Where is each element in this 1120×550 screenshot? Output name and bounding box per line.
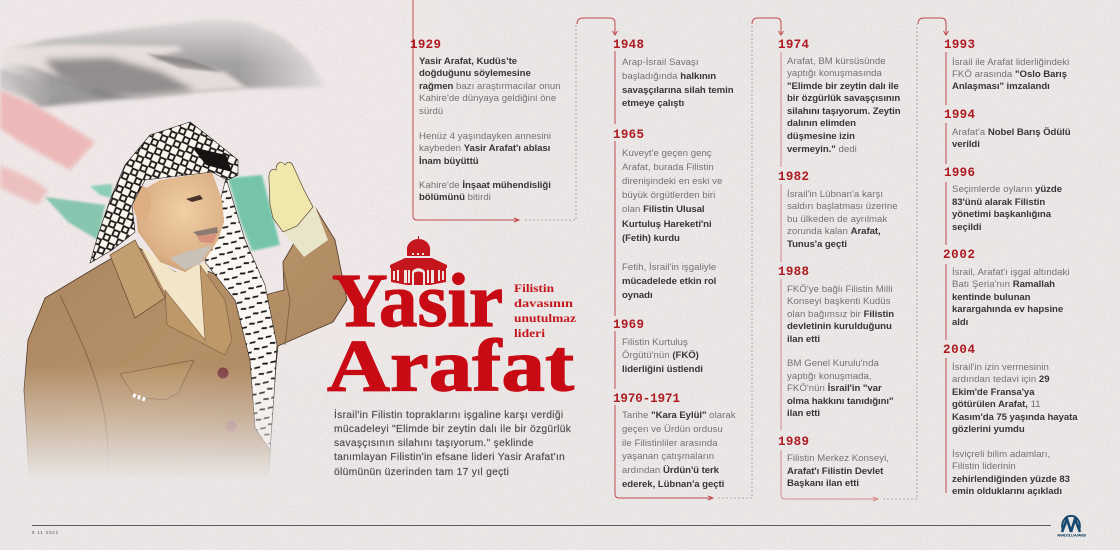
entry 1970-1971: 1970-1971	[613, 392, 680, 406]
entry 1988: Konseyi başkenti Kudüs	[787, 296, 891, 307]
entry 1988: devletinin kurulduğunu	[787, 321, 892, 332]
entry 2004: gözlerini yumdu	[952, 424, 1025, 435]
sleeve shadows	[60, 268, 290, 470]
entry 1989: Başkanı ilan etti	[787, 478, 859, 489]
entry 1965: Kuveyt'e geçen genç	[622, 148, 712, 159]
entry 1929: doğduğunu söylemesine	[419, 68, 531, 79]
entry 2004: 2004	[943, 343, 975, 357]
entry 1929: Yasir Arafat, Kudüs’te	[419, 56, 517, 67]
title: Yasir	[332, 259, 503, 343]
entry 1929	[410, 38, 561, 203]
scarf drape	[205, 178, 277, 450]
entry 1929: bölümünü bitirdi	[419, 192, 491, 203]
entry 1982: Tunus'a geçti	[787, 239, 847, 250]
entry 1988: olma hakkını tanıdığını"	[787, 396, 894, 407]
entry 1994	[944, 108, 1071, 150]
entry 1970-1971: ardından Ürdün'ü terk	[622, 465, 720, 476]
entry 1929: kaybeden Yasir Arafat'ı ablası	[419, 143, 550, 154]
entry 1929: 1929	[410, 38, 441, 52]
entry 2002	[943, 248, 1070, 328]
entry 1993: İsrail ile Arafat liderliğindeki	[952, 57, 1069, 68]
jacket	[24, 207, 347, 490]
entry 2004: Filistin liderinin	[952, 461, 1016, 472]
cuff and hand	[269, 162, 328, 257]
entry 2004: Kasım'da 75 yaşında hayata	[952, 412, 1078, 423]
entry 1982: İsrail'in Lübnan'a karşı	[787, 189, 883, 200]
entry 1993: FKÖ arasında "Oslo Barış	[952, 69, 1067, 80]
entry 1988: FKÖ'nün İsrail'in "var	[787, 383, 882, 394]
entry 1965: oynadı	[622, 290, 653, 301]
entry 1929: Henüz 4 yaşındayken annesini	[419, 131, 551, 142]
entry 1974: Arafat, BM kürsüsünde	[787, 56, 886, 67]
entry 1970-1971: Tarihe "Kara Eylül" olarak	[622, 410, 736, 421]
entry 1994: Arafat'a Nobel Barış Ödülü	[952, 127, 1071, 138]
entry 1970-1971: ederek, Lübnan'a geçti	[622, 479, 724, 490]
entry 1988: BM Genel Kurulu'nda	[787, 358, 879, 369]
entry 1948: etmeye çalıştı	[622, 98, 684, 109]
entry 1965: Kurtuluş Hareketi'ni	[622, 219, 712, 230]
entry 2002: 2002	[943, 248, 975, 262]
entry 1965: (Fetih) kurdu	[622, 233, 680, 244]
entry 1965: direnişindeki en eski ve	[622, 176, 722, 187]
entry 1982: 1982	[778, 170, 809, 184]
entry 1948	[613, 38, 734, 109]
collar and shirt	[110, 240, 232, 355]
entry 1988: yaptığı konuşmada,	[787, 371, 872, 382]
entry 1948: savaşçılarına silah temin	[622, 85, 734, 96]
intro paragraph: İsrail'in Filistin topraklarını işgaline karşı verdiği	[334, 408, 563, 421]
entry 2002: İsrail, Arafat'ı işgal altındaki	[952, 267, 1070, 278]
subtitle: lideri	[514, 326, 546, 340]
entry 1982	[778, 170, 898, 250]
entry 1974: "Elimde bir zeytin dalı ile	[787, 81, 899, 92]
entry 1965: olan Filistin Ulusal	[622, 204, 705, 215]
entry 1988: olan bağımsız bir Filistin	[787, 309, 894, 320]
entry 1993: Anlaşması" imzalandı	[952, 81, 1050, 92]
entry 1988: FKÖ'ye bağlı Filistin Milli	[787, 284, 893, 295]
entry 1965: mücadelede etkin rol	[622, 276, 716, 287]
entry 2004: İsrail'in izin vermesinin	[952, 362, 1049, 373]
entry 1996: Seçimlerde oyların yüzde	[952, 184, 1062, 195]
entry 1970-1971: geçen ve Ürdün ordusu	[622, 424, 723, 435]
entry 1965: 1965	[613, 128, 644, 142]
entry 1996: seçildi	[952, 222, 981, 233]
flag illustration	[0, 19, 325, 251]
entry 1982: zorunda kalan Arafat,	[787, 226, 881, 237]
entry 1974: 1974	[778, 38, 809, 52]
entry 2004: götürülen Arafat, 11	[952, 399, 1041, 410]
intro paragraph: ölümünün üzerinden tam 17 yıl geçti	[334, 467, 509, 478]
entry 1929: Kahire'de İnşaat mühendisliği	[419, 180, 551, 191]
entry 1994: 1994	[944, 108, 975, 122]
intro paragraph: tanımlayan Filistin'in efsane lideri Yasir Arafat'ın	[334, 452, 565, 463]
entry 1969: Filistin Kurtuluş	[622, 337, 688, 348]
entry 1994: verildi	[952, 139, 980, 150]
entry 1996: yönetimi başkanlığına	[952, 209, 1052, 220]
entry 1929: sürdü	[419, 106, 443, 117]
face	[133, 172, 224, 272]
entry 1989: 1989	[778, 435, 809, 449]
title: Arafat	[327, 326, 574, 408]
entry 1974	[778, 38, 901, 155]
entry 2004: emin olduklarını açıkladı	[952, 486, 1062, 497]
subtitle: Filistin	[514, 281, 554, 295]
subtitle: unutulmaz	[514, 311, 577, 325]
entry 1988: ilan etti	[787, 408, 820, 419]
entry 2002: kentinde bulunan	[952, 292, 1031, 303]
entry 1982: saldırı başlatması üzerine	[787, 201, 898, 212]
entry 1948: Arap-İsrail Savaşı	[622, 57, 699, 68]
entry 1929: İnam büyüttü	[419, 156, 479, 167]
entry 1993	[944, 38, 1069, 92]
entry 1989	[778, 435, 889, 489]
entry 2004: Ekim'de Fransa'ya	[952, 387, 1035, 398]
intro paragraph	[334, 408, 572, 478]
entry 1948: başladığında halkının	[622, 71, 716, 82]
entry 1989: Filistin Merkez Konseyi,	[787, 453, 889, 464]
title	[327, 259, 574, 408]
footer date: 8 11 2021	[32, 530, 59, 535]
entry 1993: 1993	[944, 38, 975, 52]
entry 2004: ardından tedavi için 29	[952, 374, 1049, 385]
entry 1965: Fetih, İsrail'in işgaliyle	[622, 262, 716, 273]
entry 2002: karargahında ev hapsine	[952, 304, 1063, 315]
entry 1969	[613, 318, 703, 375]
timeline connector lines	[413, 0, 948, 501]
entry 1948: 1948	[613, 38, 644, 52]
entry 2002: aldı	[952, 317, 968, 328]
entry 1974: yaptığı konuşmasında	[787, 68, 882, 79]
entry 2004	[943, 343, 1078, 497]
subtitle: davasının	[514, 296, 573, 310]
entry 1974: silahını taşıyorum. Zeytin	[787, 106, 901, 117]
entry 1974: dalının elimden	[787, 118, 856, 129]
entry 1982: bu ülkeden de ayrılmak	[787, 214, 887, 225]
footer rule	[32, 524, 1051, 526]
entry 1970-1971	[613, 392, 736, 490]
entry 1929: Kahire'de dünyaya geldiğini öne	[419, 93, 556, 104]
entry 1988: 1988	[778, 265, 809, 279]
keffiyeh headdress	[90, 122, 238, 263]
entry 1996: 1996	[944, 166, 975, 180]
entry 1970-1971: ile Filistinliler arasında	[622, 438, 718, 449]
entry 1974: düşmesine izin	[787, 131, 855, 142]
entry 1929: rağmen bazı araştırmacılar onun	[419, 81, 561, 92]
portrait of Yasir Arafat	[24, 122, 347, 490]
intro paragraph: savaşçısının silahını taşıyorum." şeklinde	[334, 438, 534, 449]
entry 2004: zehirlendiğinden yüzde 83	[952, 474, 1070, 485]
entry 1970-1971: yaşanan çatışmaların	[622, 451, 714, 462]
entry 1965: Arafat, burada Filistin	[622, 162, 714, 173]
icon: Dome of the Rock	[390, 236, 447, 285]
entry 1974: vermeyin." dedi	[787, 144, 857, 155]
intro paragraph: mücadeleyi "Elimde bir zeytin dalı ile bir özgürlük	[334, 424, 572, 435]
entry 1965: büyük örgütlerden biri	[622, 190, 715, 201]
entry 2002: Batı Şeria'nın Ramallah	[952, 279, 1055, 290]
entry 1965	[613, 128, 722, 301]
logo: AA: ANADOLU AJANSI	[1057, 532, 1086, 538]
entry 1996	[944, 166, 1062, 233]
subtitle	[514, 281, 577, 340]
entry 1996: 83'ünü alarak Filistin	[952, 197, 1045, 208]
entry 1988	[778, 265, 894, 419]
entry 1969: 1969	[613, 318, 644, 332]
entry 2004: İsviçreli bilim adamları,	[952, 449, 1050, 460]
entry 1974: bir özgürlük savaşçısının	[787, 93, 900, 104]
entry 1989: Arafat'ı Filistin Devlet	[787, 466, 884, 477]
pocket and buttons	[120, 360, 236, 432]
entry 1988: ilan etti	[787, 334, 820, 345]
entry 1969: Örgütü'nün (FKÖ)	[622, 350, 699, 361]
entry 1969: liderliğini üstlendi	[622, 364, 703, 375]
logo: AA	[1057, 516, 1086, 538]
